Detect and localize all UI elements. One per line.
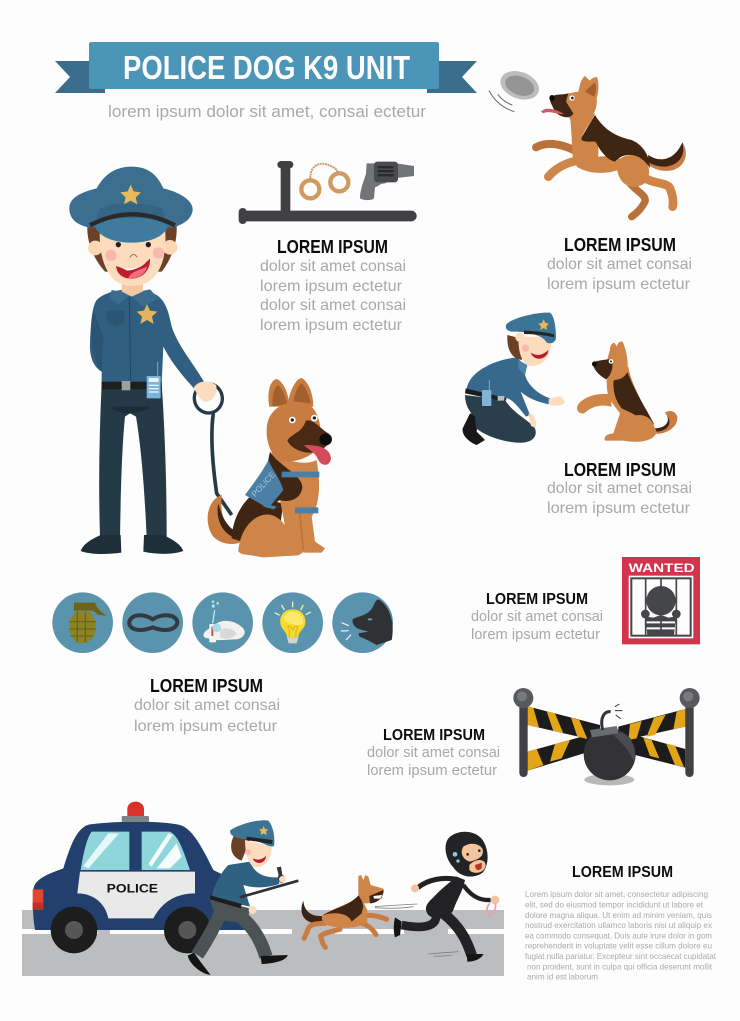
text block: chase description: ea commodo consequat. Duis aute irure dolor in gom — [525, 930, 712, 940]
wanted poster: WANTED — [629, 561, 695, 575]
text block: training: lorem ipsum ectetur — [547, 276, 691, 293]
trousers — [465, 395, 536, 443]
tail — [301, 901, 327, 923]
text block: equipment: lorem ipsum ectetur — [260, 317, 403, 334]
hind legs — [630, 183, 645, 217]
dog head — [607, 341, 628, 380]
text block: bomb: lorem ipsum ectetur — [367, 763, 497, 779]
text block: friendship: dolor sit amet consai — [547, 480, 692, 497]
leash loop — [192, 381, 225, 415]
head — [358, 875, 384, 903]
icon: mask — [122, 592, 183, 653]
chest — [570, 113, 598, 168]
text block: wanted: lorem ipsum ectetur — [471, 627, 600, 643]
wheels — [51, 907, 97, 953]
torso — [426, 877, 465, 919]
text block: equipment — [260, 237, 406, 334]
vest — [245, 460, 283, 508]
cap — [230, 820, 274, 846]
legs — [304, 915, 387, 947]
text block: chase description: non proident, sunt in culpa qui officia deserunt mollit — [527, 962, 713, 972]
text block: training: dolor sit amet consai — [547, 256, 692, 273]
text block: skills: dolor sit amet consai — [134, 697, 280, 714]
text block: chase description: fugiat nulla pariatur. Excepteur sint occaecat cupidatat — [525, 951, 717, 961]
text block: wanted: dolor sit amet consai — [471, 609, 603, 625]
tail — [647, 142, 686, 171]
text block: wanted — [471, 591, 603, 643]
dark back — [232, 497, 283, 542]
boots — [463, 413, 485, 445]
handcuffs — [301, 164, 348, 198]
icon: drugs and syringe — [192, 592, 253, 653]
torso — [467, 357, 550, 417]
shirt — [90, 288, 204, 388]
wanted poster — [622, 557, 700, 644]
dog jumping for frisbee — [489, 66, 686, 217]
posts — [519, 702, 528, 777]
head — [507, 335, 527, 360]
text block: skills: LOREM IPSUM — [150, 676, 263, 696]
frisbee — [496, 66, 543, 105]
cap — [69, 167, 193, 227]
text block: chase description: reprehenderit in voluptate velit esse cillum dolore eu — [525, 940, 712, 950]
legs — [197, 907, 223, 955]
revolver — [360, 163, 414, 200]
text block: chase description: nostrud exercitation ullamco laboris nisi ut aliquip ex — [525, 920, 713, 930]
round skill icons — [52, 592, 393, 653]
sitting dog with police vest: POLICE — [249, 469, 278, 499]
chest and front legs — [272, 452, 325, 553]
dog body — [605, 367, 657, 442]
text block: chase description: anim id est laborum — [527, 972, 598, 982]
title banner: POLICE DOG K9 UNIT — [123, 49, 410, 86]
running officer — [188, 820, 298, 975]
belt and radio — [102, 382, 162, 389]
text block: bomb: dolor sit amet consai — [367, 745, 500, 761]
tail — [208, 495, 240, 544]
text block: chase description: LOREM IPSUM — [572, 864, 673, 881]
icon: light bulb — [262, 592, 323, 653]
icon: grenade — [52, 592, 113, 653]
hands — [549, 396, 565, 406]
head — [231, 833, 250, 861]
text block: bomb — [367, 727, 500, 779]
text block: equipment: dolor sit amet consai — [260, 297, 406, 314]
barrier tape with bomb — [513, 688, 700, 785]
road — [22, 910, 504, 976]
dog paw — [577, 394, 612, 413]
officer with leash — [69, 167, 232, 554]
haunch — [238, 515, 303, 557]
head — [87, 225, 177, 272]
text block: equipment: lorem ipsum ectetur — [260, 278, 403, 295]
text block: chase description — [525, 864, 717, 982]
body — [322, 895, 367, 928]
text block: chase description: dolore magna aliqua. Ut enim ad minim veniam, quis — [525, 910, 712, 920]
dark saddle — [263, 452, 302, 508]
police car: POLICE — [107, 882, 158, 896]
near front leg — [548, 159, 588, 177]
hand — [194, 381, 217, 402]
police car — [33, 802, 247, 953]
text block: friendship — [547, 460, 692, 517]
baton and hand — [240, 881, 298, 897]
baton, handcuffs and revolver — [239, 161, 417, 224]
limbs — [402, 878, 491, 955]
text block: chase description: Lorem ipsum dolor sit amet, consectetur adipiscing — [525, 889, 708, 899]
chasing dog — [301, 875, 387, 947]
text block: training — [547, 235, 692, 293]
text block: training: LOREM IPSUM — [564, 235, 676, 255]
text block: skills — [134, 676, 280, 735]
badge star — [137, 304, 157, 324]
title banner — [55, 42, 477, 93]
hooded head — [446, 832, 488, 877]
bomb — [584, 774, 634, 785]
saddle — [581, 115, 650, 168]
text block: wanted: LOREM IPSUM — [486, 591, 588, 608]
leash — [212, 413, 232, 515]
text block: skills: lorem ipsum ectetur — [134, 718, 278, 735]
text block: friendship: lorem ipsum ectetur — [547, 500, 691, 517]
fleeing burglar — [375, 832, 499, 962]
head — [560, 76, 598, 125]
torso — [212, 862, 279, 907]
text block: friendship: LOREM IPSUM — [564, 460, 676, 480]
sitting dog with police vest — [208, 378, 332, 557]
cap — [506, 313, 556, 343]
baton — [239, 161, 417, 224]
tape — [528, 706, 600, 742]
text block: equipment: dolor sit amet consai — [260, 258, 406, 275]
pants — [99, 383, 167, 538]
belly and thigh — [577, 155, 620, 173]
far front leg — [536, 144, 575, 151]
head — [268, 378, 313, 407]
text block: equipment: LOREM IPSUM — [277, 237, 388, 257]
subtitle: lorem ipsum dolor sit amet, consai ectetur — [108, 102, 426, 121]
dog tail — [655, 411, 677, 434]
text block: bomb: LOREM IPSUM — [383, 727, 485, 744]
kneeling officer and dog shaking paw — [463, 313, 677, 445]
text block: chase description: elit, sed do eiusmod tempor incididunt ut labore et — [525, 900, 704, 910]
icon: barking dog — [332, 592, 393, 653]
